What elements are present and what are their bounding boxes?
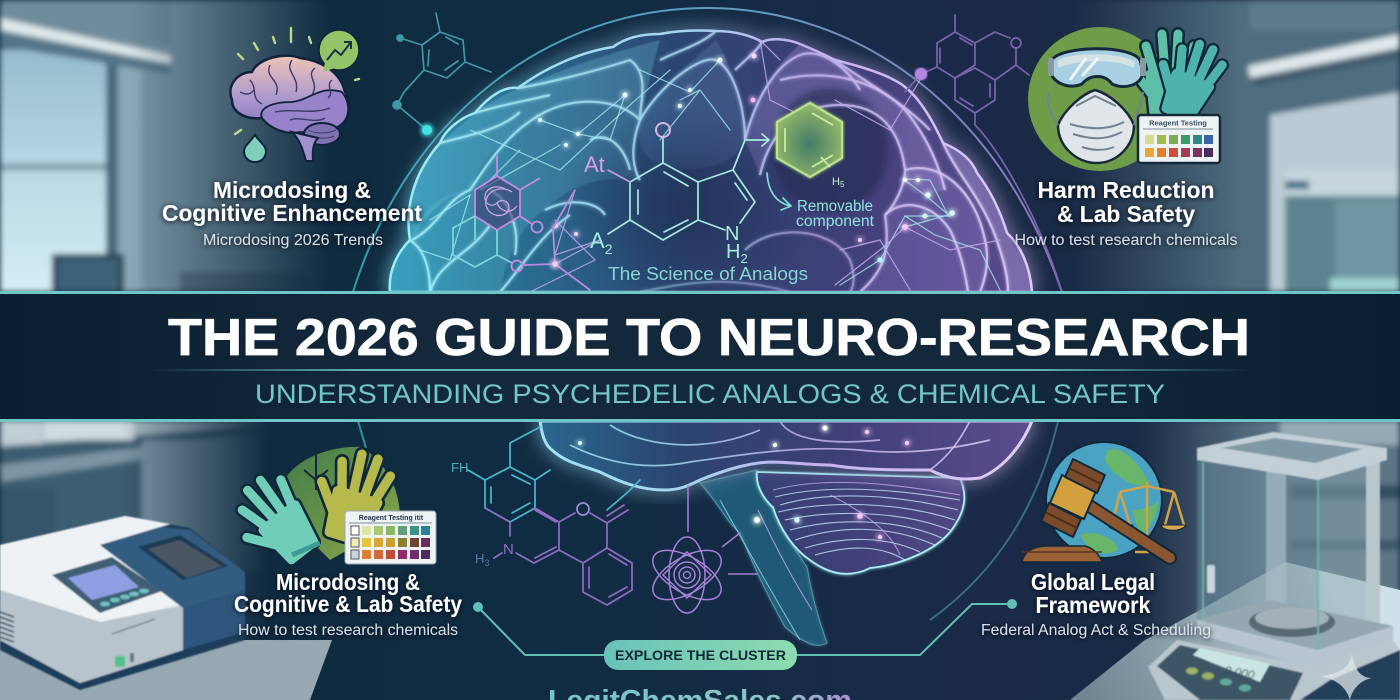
- subtitle: UNDERSTANDING PSYCHEDELIC ANALOGS & CHEMICAL SAFETY: [255, 379, 1165, 409]
- heading: harm reduction and lab safety: How to test research chemicals: [1014, 232, 1238, 249]
- lab background: top left window and wall: [0, 0, 314, 291]
- heading: microdosing and cognitive enhancement: Cognitive Enhancement: [162, 200, 422, 226]
- orbit arcs: [353, 8, 1062, 620]
- heading: global legal framework: Framework: [1036, 592, 1151, 618]
- molecule: lower ring system: FH: [451, 460, 468, 475]
- heading: microdosing and cognitive lab safety: [234, 569, 462, 639]
- brain: upper hemisphere: [390, 30, 1032, 305]
- molecule: central analog structure: N: [725, 223, 739, 245]
- heading: microdosing and cognitive lab safety: How to test research chemicals: [238, 622, 458, 639]
- molecule: central analog structure: 5: [840, 180, 845, 189]
- heading: microdosing and cognitive enhancement: Microdosing 2026 Trends: [203, 232, 383, 249]
- lab background: bottom right shelves: [1150, 422, 1400, 636]
- molecule: central analog structure: [584, 103, 875, 284]
- heading: global legal framework: Federal Analog Act & Scheduling: [981, 622, 1211, 639]
- table under balance: [1070, 562, 1400, 700]
- brain: lower hemisphere, cerebellum and brain stem: [540, 421, 1032, 645]
- heading: microdosing and cognitive enhancement: [162, 177, 422, 249]
- heading: microdosing and cognitive lab safety: Microdosing &: [276, 569, 420, 595]
- watermark sparkle: [1320, 654, 1372, 700]
- lab instrument: analytical balance: [1148, 432, 1400, 700]
- molecule: central analog structure: H: [832, 176, 840, 188]
- icon: brain with growth bubble: [230, 28, 359, 162]
- molecule: central analog structure: 2: [605, 241, 613, 257]
- translucent lobes: [390, 40, 1032, 292]
- explore the cluster pill: [604, 640, 797, 670]
- molecule: central analog structure: 2: [740, 251, 748, 266]
- molecule: lower ring system: 3: [484, 558, 489, 568]
- explore the cluster pill: EXPLORE THE CLUSTER: [615, 647, 786, 663]
- molecule: central analog structure: The Science of Analogs: [608, 264, 808, 284]
- molecule: lower ring system: N: [503, 541, 514, 558]
- molecule: left spiral ring: [453, 156, 590, 290]
- molecule: lower ring system: [451, 427, 640, 605]
- title band: [0, 291, 1400, 422]
- molecule: top right: [905, 15, 1062, 292]
- icon: sacred geometry flower: [645, 485, 758, 613]
- molecule: central analog structure: At: [584, 152, 605, 177]
- lab instrument: analytical balance: 0.000: [1223, 663, 1256, 682]
- connector lines: [473, 599, 1017, 655]
- icon: gavel, globe and scales: [1022, 442, 1186, 562]
- icon: gloves and reagent testing kit: [224, 445, 436, 573]
- heading: microdosing and cognitive lab safety: Cognitive & Lab Safety: [234, 591, 462, 617]
- icon: goggles, mask, gloves and reagent card: Reagent Testing: [1149, 118, 1207, 128]
- molecule: top left: [393, 13, 491, 135]
- table under spectrometer: [0, 640, 332, 700]
- lab background: bottom left bench: [0, 422, 259, 640]
- molecule: central analog structure: A: [590, 228, 605, 253]
- heading: harm reduction and lab safety: & Lab Safety: [1057, 201, 1195, 227]
- heading: harm reduction and lab safety: Harm Reduction: [1038, 177, 1214, 203]
- heading: global legal framework: Global Legal: [1031, 569, 1155, 595]
- molecule: central analog structure: Removable: [797, 198, 873, 215]
- molecule: lower ring system: H: [475, 551, 484, 566]
- icon: goggles, mask, gloves and reagent card: [1028, 27, 1226, 171]
- lab background: top right fume hood: [1060, 0, 1400, 292]
- main title: THE 2026 GUIDE TO NEURO-RESEARCH: [168, 309, 1250, 367]
- heading: global legal framework: [981, 569, 1211, 639]
- icon: gloves and reagent testing kit: Reagent Testing itit: [359, 515, 424, 522]
- molecule: central analog structure: component: [796, 213, 875, 230]
- heading: microdosing and cognitive enhancement: Microdosing &: [213, 177, 371, 203]
- heading: harm reduction and lab safety: [1014, 177, 1238, 249]
- lab instrument: spectrometer: [0, 516, 245, 690]
- molecule: central analog structure: H: [726, 241, 740, 263]
